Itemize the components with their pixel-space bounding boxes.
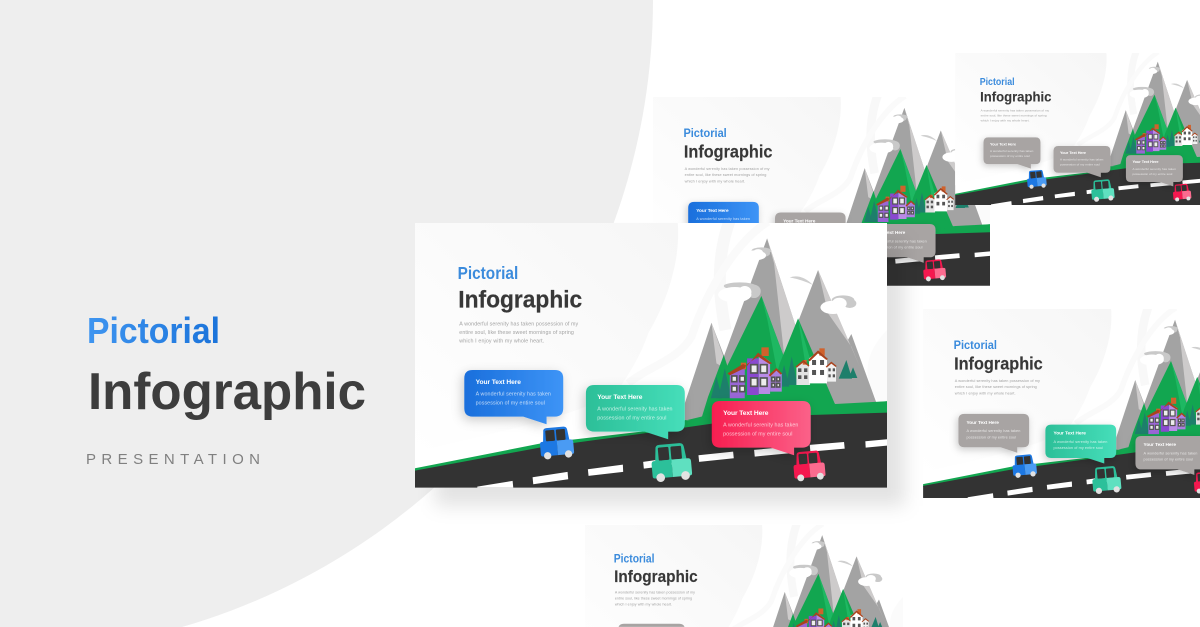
callout: green — [586, 385, 685, 439]
callout: grey right: A wonderful serenity has taken — [873, 239, 927, 243]
callout: grey left — [618, 624, 685, 627]
callout: grey left: Your Text Here — [966, 420, 999, 426]
callout: grey left: A wonderful serenity has taken — [990, 149, 1034, 153]
callout: grey middle — [775, 213, 846, 251]
slide title: which I enjoy with my whole heart. — [955, 391, 1016, 395]
slide preview: back centre slide — [682, 97, 990, 286]
cover title block — [86, 310, 366, 468]
heading: Pictorial: Pictorial — [87, 310, 220, 351]
callout: grey middle: Your Text Here — [1060, 151, 1086, 155]
main slide title: A wonderful serenity has taken possession of my — [459, 321, 579, 327]
callout: grey middle: possession of my entire soul — [783, 234, 833, 238]
callout: grey middle: A wonderful serenity has taken — [783, 228, 837, 232]
callout: red: A wonderful serenity has taken — [723, 423, 798, 429]
slide title: A wonderful serenity has taken possession of my — [981, 109, 1050, 113]
slide title: Pictorial — [954, 338, 997, 352]
callout: grey left: Your Text Here — [990, 142, 1016, 146]
slide title: entire soul, like these sweet mornings of spring — [981, 114, 1047, 118]
callout: blue: Your Text Here — [696, 208, 729, 214]
slide title: which I enjoy with my whole heart. — [981, 119, 1030, 123]
slide title — [683, 126, 773, 183]
callout: grey right — [865, 224, 936, 263]
main slide — [415, 223, 887, 488]
main slide title — [458, 263, 582, 345]
callout: grey middle — [1053, 146, 1110, 177]
callout: grey right: Your Text Here — [1132, 160, 1159, 164]
callout: grey right: Your Text Here — [873, 230, 906, 236]
callout: blue: possession of my entire soul — [696, 223, 746, 227]
callout: grey right: possession of my entire soul — [1144, 458, 1193, 462]
callout: grey right: possession of my entire soul — [1132, 172, 1173, 176]
slide title: Pictorial — [683, 126, 727, 140]
callout: red — [712, 401, 811, 455]
callout: grey left: possession of my entire soul — [990, 154, 1030, 158]
slide title: A wonderful serenity has taken possession of my — [955, 379, 1040, 383]
main slide drop shadow — [435, 240, 905, 506]
callout: red: Your Text Here — [723, 410, 769, 417]
slide title — [954, 338, 1043, 395]
callout: blue: A wonderful serenity has taken — [696, 217, 750, 221]
slide title: entire soul, like these sweet mornings of spring — [685, 173, 766, 177]
slide title: entire soul, like these sweet mornings of spring — [615, 597, 692, 601]
slide title: A wonderful serenity has taken possession of my — [615, 591, 695, 595]
callout: grey right: A wonderful serenity has taken — [1144, 451, 1197, 455]
slide title: Pictorial — [614, 552, 655, 565]
slide preview: top right slide — [955, 53, 1200, 205]
slide title — [980, 77, 1052, 123]
callout: grey middle: Your Text Here — [783, 219, 816, 225]
slide title: Infographic — [614, 568, 698, 586]
subheading: presentation: PRESENTATION — [86, 451, 260, 468]
main slide title: entire soul, like these sweet mornings of spring — [459, 330, 574, 336]
slide title: which I enjoy with my whole heart. — [685, 179, 745, 183]
callout: grey right — [1135, 436, 1200, 475]
callout: grey right: A wonderful serenity has taken — [1132, 167, 1176, 171]
callout: green — [1045, 425, 1116, 463]
main slide title: which I enjoy with my whole heart. — [459, 339, 544, 345]
callout: grey right: Your Text Here — [1144, 442, 1176, 448]
slide title: which I enjoy with my whole heart. — [615, 602, 672, 606]
callout: green: possession of my entire soul — [597, 415, 666, 421]
callout: blue — [688, 202, 759, 241]
callout: green: possession of my entire soul — [1053, 446, 1103, 450]
callout: blue: Your Text Here — [476, 379, 521, 386]
callout: grey right: possession of my entire soul — [873, 245, 923, 249]
slide preview: bottom slide — [614, 525, 889, 627]
callout: grey left — [958, 414, 1029, 453]
main slide title: Infographic — [458, 287, 582, 314]
callout: grey right — [1126, 155, 1183, 186]
callout: grey middle: A wonderful serenity has taken — [1060, 158, 1104, 162]
slide title: Infographic — [954, 353, 1043, 373]
slide title: Pictorial — [980, 77, 1015, 88]
callout: grey left — [984, 137, 1040, 169]
slide preview: right middle slide — [923, 309, 1200, 498]
slide title: Infographic — [980, 89, 1052, 104]
callout: blue — [464, 370, 563, 424]
slide title: Infographic — [684, 142, 773, 161]
callout: green: Your Text Here — [1053, 431, 1086, 437]
callout: grey left: A wonderful serenity has taken — [966, 429, 1020, 433]
callout: blue: A wonderful serenity has taken — [476, 392, 551, 398]
callout: grey middle: possession of my entire soul — [1060, 163, 1100, 167]
callout: green: A wonderful serenity has taken — [597, 407, 673, 413]
background: large grey quarter circle — [0, 0, 653, 627]
slide title — [614, 552, 698, 606]
callout: grey left: possession of my entire soul — [966, 435, 1016, 439]
callout: blue: possession of my entire soul — [476, 400, 545, 406]
callout: green: A wonderful serenity has taken — [1053, 440, 1107, 444]
slide title: A wonderful serenity has taken possession of my — [685, 167, 770, 171]
heading: Infographic: Infographic — [88, 363, 366, 421]
callout: green: Your Text Here — [597, 394, 643, 401]
callout: red: possession of my entire soul — [723, 431, 792, 437]
main slide title: Pictorial — [458, 263, 518, 283]
slide title: entire soul, like these sweet mornings of spring — [955, 385, 1037, 389]
